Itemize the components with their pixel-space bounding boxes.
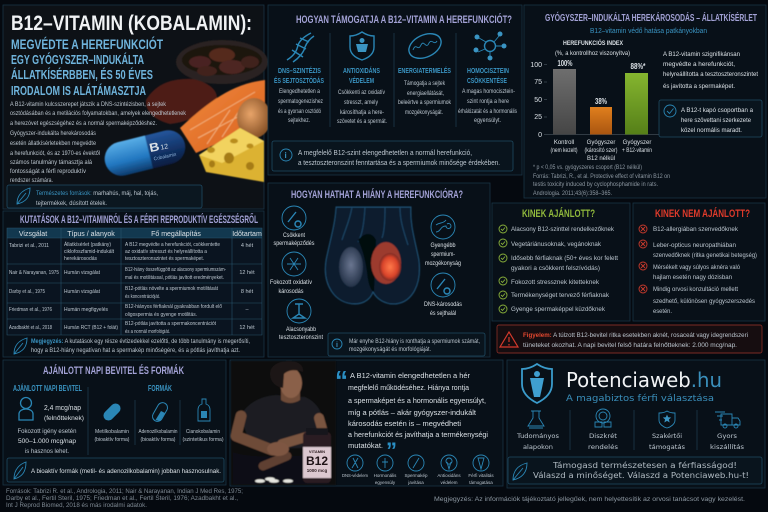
heading: HOGYAN TÁMOGATJA A B12–VITAMIN A HEREFUNKCIÓT? (296, 13, 512, 26)
info box: a tesztoszteronszint fenntartása és a spermiumok minősége érdekében. (298, 160, 500, 167)
column: DNS-szintézis: sejtekhez. (288, 118, 310, 124)
column: antioxidáns: VÉDELEM (349, 76, 374, 85)
callout: A B12-t kapó csoportban a (681, 107, 753, 114)
column: antioxidáns: Csökkenti az oxidatív (338, 90, 385, 96)
call to action: Válaszd a minőséget. Válaszd a Potenciaweb.hu-t! (533, 470, 749, 480)
column: energiatermelés: energiaellátását, (407, 91, 444, 97)
quote text (335, 365, 488, 463)
panel: recommended for (492, 203, 630, 321)
feature: diszkrét: rendelés (588, 444, 618, 451)
chart footnote and source: * p < 0,05 vs. gyógyszeres csoport (B12 nélkül) (533, 165, 642, 171)
sources text: Források: Tabrizi R. et al., Andrologia, 2011; Nair & Narayanan, Indian J Med Res, 1975; (6, 489, 243, 495)
info box: mozgékonyságát és morfológiáját. (349, 347, 431, 353)
table: 12 hét (239, 325, 255, 331)
check list: Fokozott stressznek kitetteknek (511, 279, 600, 286)
pill label: B (148, 139, 161, 155)
info box (328, 333, 485, 356)
cross list: szedhető, különösen gyógyszerszedés (653, 298, 756, 305)
column: homocisztein: A magas homocisztein- (462, 89, 515, 95)
table: az oxidatív stresszt és helyreállította a (125, 249, 208, 255)
bar chart: 75 (534, 79, 542, 86)
bottle label: B12 (306, 454, 328, 468)
bioactive note (7, 458, 224, 482)
forms column: (szintetikus forma) (182, 437, 224, 443)
table: A B12 megvédte a herefunkciót, csökkentette (125, 242, 220, 248)
table: Állatkísérlet (patkány) (64, 241, 111, 248)
effect: gyengébb mozgékonyság: spermium- (431, 252, 455, 258)
table: Időtartam (232, 231, 262, 238)
info box: A megfelelő B12-szint elengedhetetlen a normál herefunkció, (298, 150, 472, 157)
quote text: megfelelő működéséhez. Hiánya rontja (348, 383, 470, 392)
info box: i (284, 151, 287, 160)
icon: DNA (287, 33, 314, 62)
warning box: Figyelem: A túlzott B12-bevitel ritka esetekben aknét, rosaceát vagy idegrendszeri (523, 332, 748, 339)
benefit icons: Antioxidáns (437, 473, 461, 478)
subtitle: ÁLLATKÍSÉRBBEN, ÉS 50 ÉVES (11, 67, 153, 82)
icon: molecule (474, 32, 506, 60)
feature: tudományos: Tudományos (516, 433, 559, 440)
bar chart (530, 38, 660, 162)
bar chart: Gyógyszer (587, 140, 615, 146)
table: B12-hiány összefüggött az alacsony spermiumszám- (125, 267, 226, 273)
anatomy illustration (325, 207, 420, 304)
cross list (639, 225, 757, 315)
table: 12 hét (239, 270, 255, 276)
bioactive note: A bioaktív formák (metil- és adenozilkobalamin) jobban hasznosulnak. (31, 468, 221, 475)
quote text: “ (335, 365, 348, 395)
table: 4 hét (241, 243, 254, 249)
sources text (6, 489, 243, 509)
panel: quote (230, 360, 503, 486)
info box: Már enyhe B12-hiány is ronthatja a spermiumok számát, (349, 339, 480, 345)
forms column: Cianokobalamin (186, 429, 220, 435)
bar chart: (károsító szer) (584, 148, 618, 154)
forms column: (bioaktív forma) (94, 437, 130, 443)
feature: szakértői: támogatás (649, 444, 685, 451)
subtitle (11, 35, 163, 98)
effect: DNS-károsodás (424, 273, 462, 317)
cross list: B12-allergiában szenvedőknek (653, 226, 739, 233)
bar chart: 25 (534, 114, 542, 121)
feature: gyors (710, 412, 744, 451)
column: DNS-szintézis: Elengedhetetlen a (279, 89, 321, 95)
disclaimer: Megjegyzés: Az információk tájékoztató jellegűek, nem helyettesítik az orvosi tanácsot vagy kezelést. (434, 496, 745, 503)
side text: rendszer számára. (10, 178, 53, 184)
effect: oxidatív károsodás: károsodás (278, 289, 304, 295)
table: Humán megfigyelés (64, 307, 108, 313)
table: Fő megállapítás (151, 231, 201, 238)
feature: gyors: Gyors (717, 433, 737, 440)
benefit icons: javítása (407, 480, 424, 485)
bar chart: 100% (558, 59, 572, 68)
subtitle: IRODALOM IS ALÁTÁMASZTJA (11, 83, 146, 98)
main title: B12–VITAMIN (KOBALAMIN): (11, 12, 252, 35)
result text: helyreállította a tesztoszteronszintet (663, 71, 758, 78)
column: antioxidáns: károsíthatja a here- (340, 110, 384, 116)
effect: csökkent spermaképződés (274, 206, 314, 247)
column: energiatermelés: mozgékonyságát. (405, 110, 443, 116)
table note (14, 338, 250, 354)
table: Humán vizsgálat (64, 289, 100, 295)
forms column (94, 384, 224, 443)
table (7, 228, 262, 335)
heading: HOGYAN HATHAT A HIÁNY A HEREFUNKCIÓRA? (291, 188, 463, 201)
table: és koncentrációját. (125, 294, 160, 300)
intro text: a herezóvet egészségéhez és a normál spermaképződéshez. (10, 121, 157, 127)
daily intake column: Fokozott igény esetén (18, 428, 77, 435)
column: homocisztein: érhálózatát és a hormonális (458, 109, 517, 115)
effect: alacsonyabb tesztoszteronszint: tesztoszteronszint (279, 335, 323, 341)
column: DNS-szintézis (274, 66, 324, 124)
chart footnote and source: testis toxicity induced by cyclophosphamide in rats. (533, 182, 658, 188)
quote text: károsodás esetén is – megvédheti (348, 419, 461, 428)
column: antioxidáns: stresszt, amely (344, 100, 378, 106)
column: energiatermelés: Támogatja a sejtek (404, 81, 446, 87)
warning box: tüneteket okozhat. A napi bevitel felső határa felnőtteknek: 2.000 mcg/nap. (523, 342, 737, 349)
table: B12-pótlás növelte a spermiumok motilitását (125, 286, 218, 292)
table: mal és motilitással, pótlás javított eredményeket. (125, 275, 224, 281)
tagline: A magabiztos férfi választása (566, 393, 714, 404)
effect: alacsonyabb tesztoszteronszint: Alacsonyabb (286, 327, 317, 333)
column: antioxidáns: ANTIOXIDÁNS (343, 66, 380, 75)
daily intake column (13, 384, 84, 455)
effect: oxidatív károsodás (270, 252, 312, 295)
icon: mitochondrion (405, 29, 445, 63)
effect: DNS-károsodás: és sejthalál (430, 311, 456, 317)
daily intake column: AJÁNLOTT NAPI BEVITEL (13, 384, 82, 393)
table: Vizsgálat (19, 231, 47, 238)
bottle label: 1000 mcg (307, 468, 328, 473)
daily intake column: (felnőtteknek) (44, 415, 84, 422)
column: DNS-szintézis: DNS–SZINTÉZIS (278, 66, 321, 75)
result text (663, 51, 758, 90)
effect: gyengébb mozgékonyság (425, 215, 461, 267)
benefit icons (342, 455, 494, 485)
table note: hogy a B12-hiány negatívan hat a spermakép minőségére, és a pótlás javíthatja azt. (31, 348, 240, 354)
check list: gyakori a csökkent felszívódás) (511, 265, 600, 272)
subtitle: MEGVÉDTE A HEREFUNKCIÓT (11, 35, 163, 52)
call to action: Támogasd természetesen a férfiasságod! (552, 460, 737, 470)
column: homocisztein: egyensúlyt. (474, 118, 501, 124)
column: energiatermelés: ENERGIATERMELÉS (398, 66, 451, 75)
info box: i (336, 342, 338, 349)
subheading: B12–vitamin védő hatása patkányokban (590, 28, 707, 35)
panel: how B12 supports testicular function (268, 5, 522, 175)
cross list: Leber-opticus neuropathiában (653, 242, 736, 249)
warning box (497, 325, 762, 353)
table: B12-pótlás javította a spermakoncentrációt (125, 321, 216, 327)
effect: csökkent spermaképződés: spermaképződés (274, 241, 314, 247)
result text: és javította a spermaképet. (663, 83, 735, 90)
info box (272, 141, 513, 171)
bar chart: + B12-vitamin (622, 148, 652, 154)
intro text: A B12-vitamin kulcsszerepet játszik a DNS-szintézisben, a sejtek (10, 102, 167, 108)
effect: oxidatív károsodás: Fokozott oxidatív (270, 280, 312, 286)
call to action (508, 457, 762, 484)
chart footnote and source: Forrás: Tabrizi, R., et al. Protective effect of vitamin B12 on (533, 174, 670, 180)
table note: Megjegyzés: A kutatások egy része évtizedekkel ezelőtti, de több tanulmány is megerősíti, (31, 339, 250, 345)
effect: gyengébb mozgékonyság: mozgékonyság (425, 261, 461, 267)
feature: tudományos: alapokon (523, 444, 553, 451)
quote text: míg a pótlás – akár gyógyszer-indukált (348, 408, 477, 417)
bar chart: Kontroll (554, 140, 574, 146)
check list: Termékenységet tervező férfiaknak (511, 292, 610, 299)
benefit icons: Hormonális (374, 473, 397, 478)
feature: diszkrét (588, 409, 618, 451)
natural sources box: Természetes források: marhahús, máj, hal, tojás, (36, 191, 158, 197)
column: homocisztein: HOMOCISZTEIN (467, 68, 509, 75)
check list (499, 225, 618, 313)
table: Tabrizi et al., 2011 (9, 243, 49, 249)
table: Humán vizsgálat (64, 270, 100, 276)
cross list: esetén. (653, 308, 672, 315)
cross list: szenvedőknek (ritka genetikai betegség) (653, 252, 757, 259)
side text: Gyógyszer-indukálta herekárosodás (10, 131, 96, 137)
benefit icons: védelem (440, 480, 458, 485)
feature: diszkrét: Diszkrét (589, 433, 618, 440)
column: energiatermelés: beleértve a spermiumok (398, 100, 452, 106)
column: DNS-szintézis: és a gyorsan osztódó (278, 109, 321, 115)
table: Típus / alanyok (67, 231, 115, 238)
forms column: FORMÁK (148, 384, 172, 393)
forms column: (bioaktív forma) (140, 437, 176, 443)
sources text: Darby et al., Fertil Steril, 1975; Friedman et al., Fertil Steril, 1976; Azadbakht et al., (6, 496, 238, 502)
bar chart: (%, a kontrollhoz viszonyítva) (555, 51, 630, 57)
benefit icons: egyensúly (375, 480, 396, 485)
panel: not recommended for (633, 203, 765, 321)
table: – (245, 307, 249, 313)
column: homocisztein: CSÖKKENTÉSE (467, 76, 507, 85)
callout (659, 100, 762, 137)
table: Nair & Narayanan, 1975 (9, 270, 59, 276)
table: és a normál morfológiát. (125, 329, 170, 335)
pill label: Cobalamin (153, 152, 177, 162)
bar chart: Gyógyszer (623, 140, 651, 146)
brand name: Potenciaweb.hu (566, 368, 722, 392)
forms column: Metilkobalamin (95, 429, 129, 435)
check list: Vegetáriánusoknak, vegánoknak (511, 241, 602, 248)
panel: animal experiment (524, 5, 766, 198)
quote text: a herefunkciót és javíthatja a termékenységi (348, 430, 488, 439)
bar chart: 38% (595, 97, 607, 106)
bar chart: B12 nélkül (587, 156, 615, 162)
table: ciklofoszfamid-indukált (64, 249, 114, 255)
quote text: a spermaképet és a hormonális egyensúlyt, (348, 396, 486, 405)
heading: KUTATÁSOK A B12–VITAMINRÓL ÉS A FÉRFI REPRODUKTÍV EGÉSZSÉGRŐL (20, 213, 258, 226)
table: herekárosodás (64, 256, 97, 262)
food photo (101, 40, 271, 182)
table: Darby et al., 1975 (9, 289, 45, 295)
logo shield (522, 364, 552, 403)
panel: Potenciaweb brand (507, 360, 765, 488)
benefit icons: DNS-védelem (342, 473, 368, 478)
check list: Alacsony B12-szinttel rendelkezőknek (511, 226, 615, 233)
panel: recommended intake and forms (3, 360, 226, 485)
icon: shield (350, 32, 374, 60)
feature: tudományos (516, 411, 559, 451)
daily intake column: is hasznos lehet. (25, 448, 69, 455)
bottle label: VITAMIN (309, 449, 325, 454)
effect: DNS-károsodás: DNS-károsodás (424, 302, 462, 308)
intro text (10, 102, 187, 127)
quote text: A B12-vitamin elengedhetetlen a hér (350, 371, 470, 380)
forms column: Adenozilkobalamin (138, 429, 178, 435)
intro text: osztódásában és a metilációs folyamatokban, amelyek elengedhetetlenek (10, 111, 187, 117)
effect: gyengébb mozgékonyság: Gyengébb (430, 243, 456, 249)
callout: közel normális maradt. (681, 127, 742, 134)
table: Friedman et al., 1976 (9, 307, 52, 313)
benefit icons: támogatása (469, 480, 493, 485)
man with supplement bottle (231, 361, 336, 485)
cross list: hajlam esetén nagy dózisban (653, 274, 732, 281)
side text (10, 131, 100, 184)
table: oligospermia és gyenge motilitás. (125, 312, 197, 318)
subtitle: EGY GYÓGYSZER–INDUKÁLTA (11, 52, 144, 67)
feature: gyors: kiszállítás (710, 444, 744, 451)
feature: szakértői (649, 411, 685, 451)
benefit icons: Spermakép (404, 473, 428, 478)
bottle label (306, 449, 328, 473)
bar chart: HEREFUNKCIÓS INDEX (563, 38, 624, 47)
side text: a herefunkciót, és az 1970-es évektől (10, 151, 100, 157)
heading: AJÁNLOTT NAPI BEVITEL ÉS FORMÁK (43, 364, 184, 377)
callout: here szövettani szerkezete (681, 117, 751, 124)
natural sources box (7, 185, 202, 208)
daily intake column: 2,4 mcg/nap (44, 403, 81, 412)
bar chart: 50 (534, 97, 542, 104)
cross list: Mindig orvosi konzultáció mellett (653, 286, 738, 293)
daily intake column: 500–1.000 mcg/nap (18, 438, 76, 445)
cross list: Mérsékelt vagy súlyos aknéra való (653, 264, 740, 271)
pill label (148, 136, 177, 163)
check list: Gyenge spermaképpel küzdőknek (511, 306, 606, 313)
column: DNS-szintézis: spermatogenezishez (278, 99, 323, 105)
heading: KINEK AJÁNLOTT? (522, 207, 595, 220)
column: DNS-szintézis: ÉS SEJTOSZTÓDÁS (274, 76, 324, 85)
feature: szakértői: Szakértői (652, 433, 682, 440)
bar chart: (nem kezelt) (550, 148, 578, 154)
table: B12-hiányos férfiaknál gyakrabban fordult elő (125, 304, 222, 310)
column: antioxidáns (337, 66, 387, 125)
bar chart: 88%* (630, 62, 646, 71)
quote text: mutatókat. (348, 441, 383, 450)
panel: hero (3, 5, 271, 209)
bar chart: 0 (538, 132, 542, 139)
column: homocisztein: szint rontja a here (467, 99, 510, 105)
table: Humán RCT (B12 + folát) (64, 325, 118, 331)
sources text: Int J Reprod Biomed, 2018 és más irodalmi adatok. (6, 503, 147, 509)
column: energiatermelés (398, 66, 452, 116)
side text: esetén állatkísérletekben megvédte (10, 141, 97, 147)
table: tesztoszteronszintet és spermaképet. (125, 256, 204, 262)
column: antioxidáns: szövetet és a spermát. (337, 119, 387, 125)
chart footnote and source: Andrologia. 2011;43(6):358–365. (533, 191, 612, 197)
side text: fontosságát a férfi reproduktív (10, 169, 86, 175)
effect: csökkent spermaképződés: Csökkent (283, 233, 305, 239)
pill label: 12 (160, 143, 169, 152)
natural sources box: tejtermékek, dúsított ételek. (36, 201, 107, 207)
panel: deficiency effects (268, 183, 490, 357)
chart footnote and source (533, 165, 670, 197)
effect: alacsonyabb tesztoszteronszint (279, 299, 323, 341)
table: 8 hét (241, 289, 254, 295)
benefit icons: Férfi vitalitás (468, 473, 494, 478)
result text: megvédte a herefunkciót, (663, 61, 735, 68)
side text: számos tanulmány támasztja alá (10, 160, 93, 166)
panel: research table (3, 211, 264, 357)
check list: Idősebb férfiaknak (50+ éves kor felett (511, 255, 618, 262)
column: homocisztein (458, 68, 517, 124)
result text: A B12-vitamin szignifikánsan (663, 51, 740, 58)
table: Azadbakht et al., 2018 (9, 325, 52, 331)
bar chart: 100 (530, 62, 542, 69)
quote text: ” (386, 438, 397, 463)
